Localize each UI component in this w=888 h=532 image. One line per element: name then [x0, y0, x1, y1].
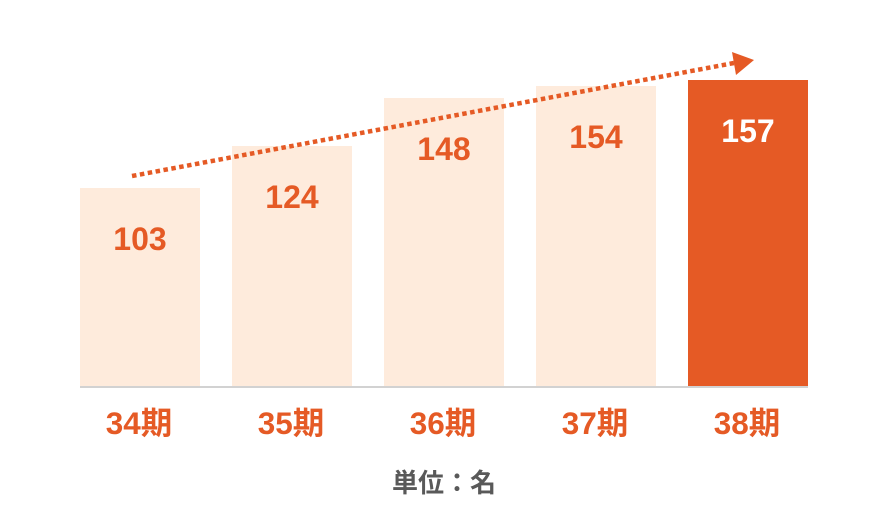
bar: 36期: 148: [417, 131, 471, 167]
category labels: 35期: [258, 405, 324, 441]
category labels: [106, 405, 780, 441]
bar: 34期: [80, 188, 200, 386]
category labels: 38期: [714, 405, 780, 441]
axis baseline: [80, 386, 808, 388]
category labels: 34期: [106, 405, 172, 441]
bar: 37期: 154: [569, 119, 623, 155]
bar: 35期: [232, 146, 352, 386]
bar: 34期: 103: [113, 221, 167, 257]
category labels: 36期: [410, 405, 476, 441]
bar: 38期: 157: [721, 113, 775, 149]
category labels: 37期: [562, 405, 628, 441]
bar: 35期: 124: [265, 179, 319, 215]
bar: 37期: [536, 86, 656, 386]
bar: 38期: [688, 80, 808, 386]
trend arrow: [132, 52, 754, 176]
unit label: 単位：名: [392, 468, 496, 498]
bar: 36期: [384, 98, 504, 386]
